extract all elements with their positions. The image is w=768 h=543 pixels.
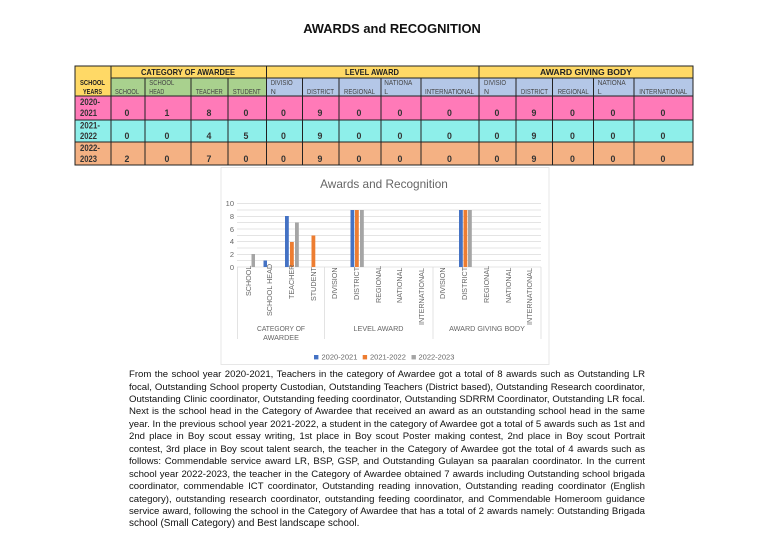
text block: awards narrative: 2nd place in Boy scout essay writing, 1st place in Boy scout Poster making contest, 2nd place in Boy scout Portrait [129,431,645,442]
table row: 2021-2022 [75,120,693,142]
chart x axis labels [244,264,534,325]
text block: awards narrative: category), outstanding research coordinator, outstanding feeding coordinator, and Commendable Homeroom guidance [129,494,645,505]
table row: 2020-2021: 9 [532,108,537,118]
chart group labels: CATEGORY OF [257,324,306,333]
chart title: Awards and Recognition [320,177,448,191]
table row: 2022-2023: 0 [281,154,286,164]
text block: awards narrative: school year 2022-2023, the teacher in the Category of Awardee obtained 7 awards including Outstanding school brigada [129,469,645,480]
table row: 2020-2021: 0 [281,108,286,118]
series: 2022-2023 [252,210,472,267]
chart x axis labels: NATIONAL [504,268,513,303]
table header: column labels: NATIONA [384,80,413,87]
table row: 2020-2021: 0 [495,108,500,118]
table row: 2022-2023: 2022- [80,143,100,153]
table row: 2022-2023: 0 [570,154,575,164]
table header: column labels: REGIONAL [344,89,375,96]
table row: 2020-2021: 2021 [80,108,97,118]
table row: 2020-2021: 0 [357,108,362,118]
table row: 2020-2021: 0 [661,108,666,118]
table header: group headings: LEVEL AWARD [345,67,399,77]
table row: 2020-2021: 0 [611,108,616,118]
table row: 2021-2022: 2021- [80,120,100,130]
chart x axis labels: INTERNATIONAL [525,268,534,325]
table header: column labels: INTERNATIONAL [425,89,474,96]
chart x axis labels: SCHOOL HEAD [265,264,274,316]
table row: 2021-2022: 9 [532,131,537,141]
table header: column labels: N [484,89,489,96]
table row: 2022-2023: 0 [611,154,616,164]
table header: group headings [75,66,693,96]
chart group labels [257,324,525,342]
chart x axis labels: DIVISION [330,267,339,299]
table row: 2022-2023: 0 [357,154,362,164]
table header: column labels: HEAD [149,89,164,96]
text block: awards narrative [129,369,645,529]
chart x axis labels: REGIONAL [482,266,491,303]
table row: 2021-2022: 0 [165,131,170,141]
table row: 2020-2021 [75,96,693,120]
table header: column labels: N [271,89,276,96]
table header: group headings: SCHOOL [80,80,106,87]
table row: 2021-2022: 0 [125,131,130,141]
text block: awards narrative: From the school year 2020-2021, Teachers in the category of Awardee got a total of 8 awards such as Outstanding LR [129,369,645,380]
table row: 2022-2023: 0 [661,154,666,164]
table header: column labels: L [598,89,602,96]
chart y axis: 2 [230,250,234,259]
table: awards summary [75,66,693,165]
table row: 2021-2022: 9 [318,131,323,141]
table row: 2020-2021: 1 [165,108,170,118]
table row: 2021-2022: 2022 [80,131,97,141]
table row: 2021-2022: 5 [244,131,249,141]
text block: awards narrative: service award, following the school in the Category of Awardee that has a total of 2 awards namely: Outstanding Brigada [129,506,645,517]
table row: 2020-2021: 0 [570,108,575,118]
chart x axis labels: DIVISION [438,267,447,299]
chart legend [314,352,454,362]
chart y axis: 8 [230,212,234,221]
table row: 2021-2022: 0 [447,131,452,141]
table row: 2020-2021: 0 [244,108,249,118]
table row: 2022-2023: 9 [532,154,537,164]
table row: 2021-2022: 0 [661,131,666,141]
text block: awards narrative: follows: Commendable service award LR, BSP, GSP, and Outstanding Gulayan sa paaralan coordinator. In the current [129,456,645,467]
table row: 2022-2023: 2023 [80,154,97,164]
table row: 2020-2021: 0 [125,108,130,118]
chart group labels: LEVEL AWARD [354,324,403,333]
table header: column labels: SCHOOL [149,80,174,87]
series: 2020-2021 [264,210,463,267]
chart y axis: 4 [230,237,234,246]
table row: 2020-2021: 8 [207,108,212,118]
table header: column labels [111,78,693,96]
chart x axis labels: INTERNATIONAL [417,268,426,325]
table row: 2021-2022: 0 [495,131,500,141]
chart group labels: AWARD GIVING BODY [449,324,525,333]
table row: 2022-2023: 2 [125,154,130,164]
chart y axis: 6 [230,225,234,234]
text block: awards narrative: year. In the previous school year 2021-2022, a student in the category of Awardee got a total of 5 awards such as 1st and [129,419,645,430]
chart x axis labels: DISTRICT [460,266,469,300]
table header: column labels: DIVISIO [271,80,293,87]
table header: column labels: NATIONA [598,80,626,87]
table row: 2020-2021: 2020- [80,97,100,107]
table row: 2022-2023: 0 [447,154,452,164]
chart y axis: 10 [226,199,234,208]
chart x axis labels: REGIONAL [374,266,383,303]
table header: column labels: TEACHER [196,89,223,96]
table header: column labels: REGIONAL [558,89,589,96]
series: 2021-2022 [290,210,467,267]
table row: 2022-2023: 0 [495,154,500,164]
table row: 2021-2022: 0 [570,131,575,141]
chart x axis labels: NATIONAL [395,268,404,303]
table header: column labels: L [384,89,388,96]
table header: group headings: CATEGORY OF AWARDEE [141,67,235,77]
table row: 2020-2021: 0 [398,108,403,118]
table header: column labels: DISTRICT [521,89,549,96]
chart legend: 2021-2022 [370,352,406,362]
table row: 2020-2021: 0 [447,108,452,118]
chart x axis labels: DISTRICT [352,266,361,300]
table row: 2021-2022: 0 [281,131,286,141]
text block: awards narrative: focal, Outstanding School property Custodian, Outstanding Teachers (District based), Outstanding Research coordinator, [129,382,645,393]
chart legend: 2022-2023 [418,352,454,362]
text block: awards narrative: Outstanding Clinic coordinator, Outstanding feeding coordinator, Outstanding SDRRM Coordinator, Outstanding LR focal. [129,394,645,405]
table row: 2022-2023: 7 [207,154,212,164]
table row: 2021-2022: 0 [357,131,362,141]
chart x axis labels: SCHOOL [244,266,253,296]
text block: awards narrative: school (Small Category) and Best landscape school. [129,518,359,529]
table row: 2021-2022: 4 [207,131,212,141]
table header: group headings: AWARD GIVING BODY [540,67,632,77]
chart legend: 2020-2021 [322,352,357,362]
chart y axis [226,199,234,272]
table header: group headings: YEARS [83,89,102,96]
title: AWARDS and RECOGNITION [303,21,481,36]
table row: 2021-2022: 0 [611,131,616,141]
table row: 2022-2023: 0 [244,154,249,164]
table row: 2021-2022: 0 [398,131,403,141]
table row: 2022-2023: 0 [398,154,403,164]
text block: awards narrative: Next is the school head in the Category of Awardee that received an award as an outstanding school head in the same [129,406,645,417]
table header: column labels: INTERNATIONAL [639,89,687,96]
text block: awards narrative: coordinator, commendable ICT coordinator, Outstanding reading innovation, Outstanding reading coordinator (English [129,481,645,492]
table header: column labels: STUDENT [233,89,261,96]
table header: column labels: DIVISIO [484,80,506,87]
chart: Awards and Recognition [221,168,549,364]
table row: 2022-2023: 0 [165,154,170,164]
table row: 2022-2023: 9 [318,154,323,164]
chart x axis labels: STUDENT [309,266,318,301]
text block: awards narrative: contest, 3rd place in Boy scout talent search, the teacher in the Category of Awardee got the total of 4 awards such as [129,444,645,455]
chart group labels: AWARDEE [263,333,299,342]
table row: 2022-2023 [75,142,693,165]
chart y axis: 0 [230,263,234,272]
table row: 2020-2021: 9 [318,108,323,118]
chart x axis labels: TEACHER [287,265,296,299]
table header: column labels: SCHOOL [115,89,139,96]
table header: column labels: DISTRICT [307,89,335,96]
